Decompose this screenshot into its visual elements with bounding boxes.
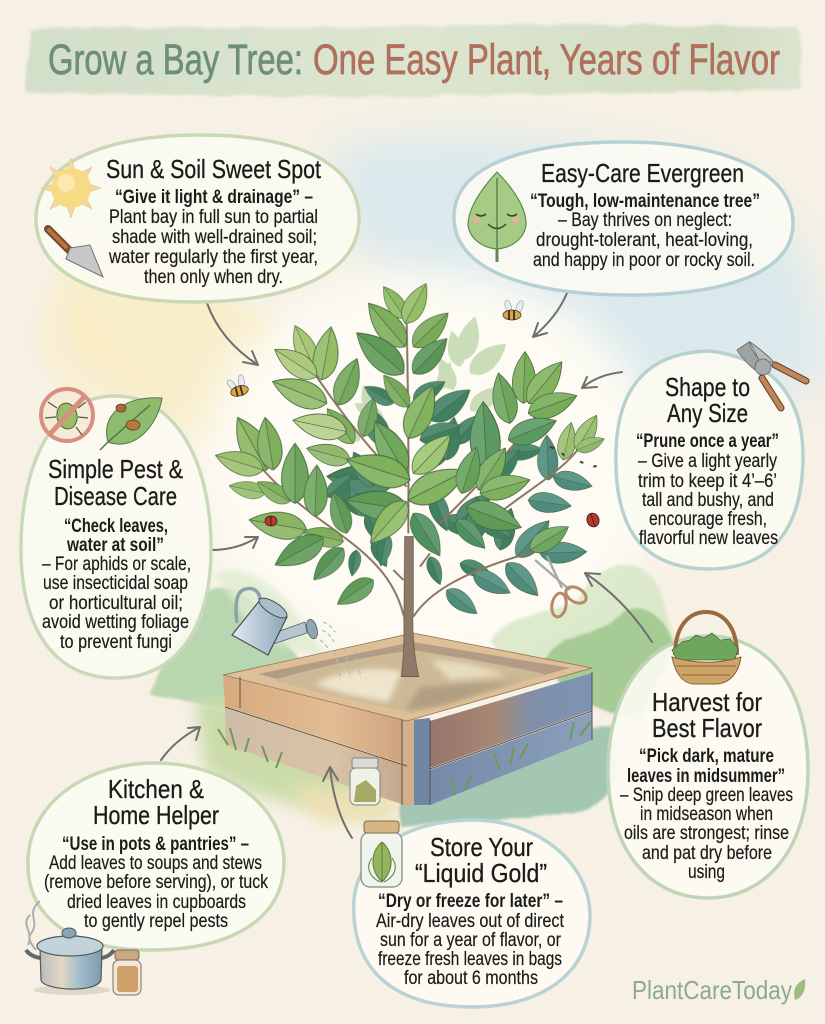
- heading: [48, 454, 183, 511]
- arrows: [161, 293, 652, 838]
- body text: freeze fresh leaves in bags: [378, 949, 562, 970]
- plank lines: [225, 672, 592, 805]
- panel: easy care evergreen: [454, 142, 793, 295]
- body text: dried leaves in cupboards: [67, 892, 246, 913]
- arrow kitchen to bed: [161, 727, 200, 760]
- body text: and pat dry before: [642, 843, 772, 864]
- sky wash: [330, 135, 825, 400]
- body text: – Bay thrives on neglect:: [558, 210, 732, 231]
- title text green: Grow a Bay Tree:: [48, 36, 303, 84]
- body text: using: [688, 862, 725, 883]
- heading: Harvest for: [652, 687, 762, 717]
- teal leaves: [441, 435, 594, 620]
- centre glow behind tree: [200, 270, 660, 670]
- icon: smiling leaf: [468, 172, 526, 262]
- ground teal: [400, 725, 616, 826]
- panel: sun and soil: [36, 135, 359, 302]
- right wood face lower: [430, 712, 592, 805]
- arrow evergreen to tree: [533, 293, 567, 337]
- icon: ladybug right: [585, 511, 601, 529]
- icon: sun: [41, 158, 101, 218]
- heading: [652, 687, 762, 743]
- title banner: [25, 25, 802, 97]
- arrow store to bed: [323, 767, 352, 838]
- heading: [415, 832, 547, 888]
- icon: leaf with bugs: [100, 398, 162, 450]
- quote: “Prune once a year”: [636, 431, 779, 452]
- icon: logo leaf: [794, 979, 805, 1000]
- body text: Plant bay in full sun to partial: [109, 207, 318, 228]
- body text: – Give a light yearly: [638, 451, 777, 472]
- panel outline: [616, 351, 803, 569]
- pale soil patch: [315, 669, 402, 702]
- top and centre leaves: [342, 279, 473, 562]
- dark soil patch: [405, 680, 520, 710]
- body text: in midseason when: [640, 804, 773, 825]
- ground left: [195, 698, 390, 815]
- panel: store: [354, 820, 590, 1007]
- icon: small jar by bed: [350, 758, 380, 805]
- arrow prune to tree: [582, 372, 622, 388]
- icon: ladybug on leaf: [265, 516, 277, 526]
- heading: “Liquid Gold”: [415, 858, 547, 888]
- left wood face lower: [225, 708, 407, 806]
- body text: [620, 785, 793, 883]
- body text: then only when dry.: [144, 267, 283, 288]
- body text: [108, 207, 318, 288]
- quote: “Check leaves,: [64, 516, 168, 537]
- heading: Store Your: [430, 832, 533, 862]
- body text: avoid wetting foliage: [42, 612, 189, 633]
- body text: to gently repel pests: [84, 911, 228, 932]
- body text: [533, 210, 755, 271]
- heading: Shape to: [665, 372, 750, 402]
- panel: kitchen and home: [26, 763, 284, 995]
- left wood face upper: [223, 676, 407, 765]
- bay tree: [212, 279, 607, 677]
- body text: for about 6 months: [404, 968, 538, 989]
- pale soil patch right: [430, 660, 505, 680]
- body text: to prevent fungi: [60, 632, 172, 653]
- body text: [42, 554, 191, 653]
- body text: oils are strongest; rinse: [624, 823, 789, 844]
- leaf spots: [550, 447, 597, 467]
- left bush pale crown: [215, 571, 330, 660]
- corner post: [402, 718, 430, 805]
- panel outline: [454, 142, 793, 295]
- icon: no bugs sign: [41, 389, 93, 441]
- right branch leaves: [450, 351, 607, 559]
- left bush: [150, 587, 300, 710]
- body text: shade with well-drained soil;: [112, 227, 317, 248]
- heading: Easy-Care Evergreen: [541, 158, 744, 188]
- faded background leaves: [318, 314, 513, 448]
- body text: [44, 853, 268, 932]
- body text: drought-tolerant, heat-loving,: [536, 230, 753, 251]
- heading: Kitchen &: [108, 774, 204, 804]
- body text: encourage fresh,: [649, 509, 767, 530]
- panel outline: [354, 820, 590, 1007]
- quote: [64, 516, 168, 556]
- rim: [223, 633, 592, 721]
- left branch leaves: [212, 321, 382, 612]
- icon: scissors: [535, 556, 589, 618]
- panel: harvest: [608, 612, 808, 898]
- icon: spice jar: [113, 950, 141, 995]
- heading: Any Size: [667, 398, 748, 428]
- ground ochre: [290, 785, 400, 822]
- quote: “Pick dark, mature: [639, 746, 774, 767]
- body text: [638, 451, 778, 549]
- trunk: [401, 537, 419, 677]
- heading: Home Helper: [93, 800, 219, 830]
- branches: [263, 323, 580, 617]
- quote: “Tough, low-maintenance tree”: [530, 191, 760, 212]
- arrow sun to tree: [207, 303, 258, 365]
- panel: shape to any size: [616, 342, 806, 569]
- body text: (remove before serving), or tuck: [44, 872, 268, 893]
- logo: PlantCareToday: PlantCareToday: [632, 975, 792, 1005]
- icon: bee left: [224, 373, 250, 399]
- body text: and happy in poor or rocky soil.: [533, 250, 755, 271]
- garden background: [150, 564, 680, 826]
- icon: large jar of leaves: [361, 821, 402, 887]
- raised garden bed: [218, 633, 592, 806]
- quote: water at soil”: [66, 535, 164, 556]
- soil: [274, 650, 545, 713]
- body text: sun for a year of flavor, or: [380, 930, 562, 951]
- arrow harvest to tree: [585, 573, 652, 642]
- sun rays: [30, 230, 280, 480]
- panel outline: [28, 763, 284, 950]
- right wood face upper: [430, 673, 592, 768]
- heading: [665, 372, 750, 428]
- right bush pale crown: [490, 564, 680, 680]
- icon: pruners: [737, 342, 806, 408]
- grass tufts: [218, 722, 590, 795]
- body text: [376, 911, 565, 989]
- heading: Simple Pest &: [48, 454, 183, 484]
- icon: basket: [672, 612, 741, 684]
- quote: leaves in midsummer”: [627, 766, 785, 787]
- icon: watering can: [232, 589, 361, 680]
- quote: [627, 746, 785, 787]
- panel outline: [36, 135, 359, 302]
- heading: [93, 774, 219, 830]
- body text: flavorful new leaves: [639, 528, 778, 549]
- icon: steam: [26, 901, 40, 950]
- inner wall: [258, 642, 570, 712]
- quote: “Use in pots & pantries” –: [62, 834, 249, 855]
- body text: trim to keep it 4’–6’: [638, 471, 777, 492]
- icon: bee top: [503, 299, 525, 320]
- body text: Air-dry leaves out of direct: [376, 911, 565, 932]
- panel outline: [608, 636, 808, 898]
- heading: Sun & Soil Sweet Spot: [106, 154, 322, 184]
- right bush dark: [545, 609, 675, 720]
- quote: “Dry or freeze for later” –: [378, 891, 563, 912]
- panel: pest and disease: [21, 389, 211, 678]
- panel outline: [21, 396, 211, 678]
- icon: trowel: [48, 229, 103, 277]
- dark background leaves: [322, 375, 544, 587]
- icon: pot: [26, 928, 114, 995]
- quote: “Give it light & drainage” –: [115, 187, 313, 208]
- body text: water regularly the first year,: [108, 247, 318, 268]
- heading: Best Flavor: [652, 713, 762, 743]
- heading: Disease Care: [54, 481, 177, 511]
- body text: Add leaves to soups and stews: [49, 853, 262, 874]
- body text: tall and bushy, and: [642, 490, 774, 511]
- body text: or horticultural oil;: [49, 593, 183, 614]
- banner wash: [25, 25, 802, 97]
- body text: – For aphids or scale,: [42, 554, 191, 575]
- arrow pest to tree: [212, 537, 258, 550]
- body text: use insecticidal soap: [43, 573, 188, 594]
